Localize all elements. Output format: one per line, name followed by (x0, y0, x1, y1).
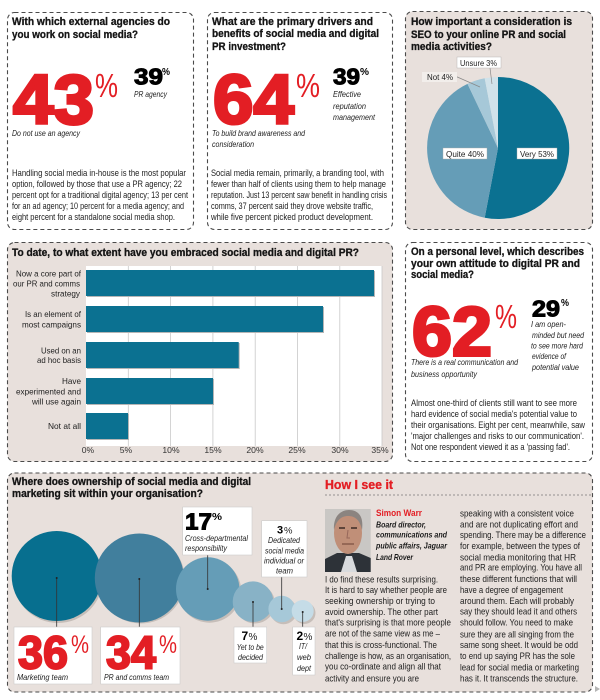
callout: 3 percent dedicated individual: 3 (277, 524, 283, 536)
callout: 2 percent IT web dept: web (297, 652, 311, 662)
axis labels: 20% (246, 445, 264, 455)
text block: drivers summary: Social media remain, primarily, a branding tool, with (211, 168, 384, 178)
text block: agencies summary: Handling social media in-house is the most popular (12, 168, 186, 178)
category labels: Now a core part of (16, 268, 82, 278)
stat: 43 percent do not use an agency: % (95, 67, 118, 104)
category labels: experimented and (16, 386, 81, 396)
text block: drivers summary (210, 168, 387, 222)
stat: 64 percent brand awareness: To build brand awareness and (212, 128, 305, 138)
heading: personal attitude: your own attitude to digital PR and (411, 258, 580, 270)
heading: how I see it: How I see it (325, 477, 394, 492)
category labels (13, 268, 82, 431)
text block: attitude summary: Almost one-third of clients still want to see more (411, 398, 577, 408)
text block: attitude summary (411, 398, 585, 452)
text block: opinion column one: activity and ensure you are (325, 673, 419, 683)
callout: 17 percent cross-departmental: responsibility (185, 543, 228, 553)
stat: 29 percent open-minded: I am open- (531, 319, 566, 329)
callout: 7 percent yet to be decided: 7 (242, 629, 248, 643)
text block: agencies summary: option, followed by those that use a PR agency; 22 (12, 179, 182, 189)
bubble: cross-departmental (176, 557, 239, 621)
stat: 39 percent effective reputation management: management (333, 112, 376, 122)
text block: opinion column one: I do find these results surprising. (325, 574, 438, 584)
panel: SEO importance (406, 12, 592, 230)
stat: 43 percent do not use an agency: Do not use an agency (12, 128, 81, 138)
callout: 3 percent dedicated individual: Dedicated (268, 535, 300, 545)
callout: 17 percent cross-departmental: Cross-departmental (185, 533, 249, 543)
callout: 36 percent marketing team: Marketing team (17, 672, 68, 682)
stat: 29 percent open-minded: minded but need (532, 330, 584, 340)
text block: drivers summary: comms, 37 percent said they drove website traffic, (211, 201, 373, 211)
heading: drivers and benefits: PR investment? (212, 41, 286, 53)
category labels: ad hoc basis (37, 355, 81, 365)
stat: 29 percent open-minded: 29 (532, 296, 560, 322)
text block: opinion column one (325, 574, 451, 683)
text block: opinion column two: say they should lead it and others (460, 607, 577, 617)
text block: opinion column one: avoid ownership. The other part (325, 607, 438, 617)
callout: 36 percent marketing team: % (71, 631, 89, 659)
text block: opinion column two: speaking with a consistent voice (460, 508, 574, 518)
text block: attitude summary: Not one respondent viewed it as a 'passing fad'. (411, 442, 570, 452)
text block: opinion column one: are not of the same view as me – (325, 628, 441, 638)
heading: external agencies (12, 16, 170, 41)
byline: Simon Warr: communications and (376, 530, 448, 540)
heading: SEO importance (411, 16, 572, 53)
callout: 2 percent IT web dept: IT/ (299, 641, 308, 651)
stat: 62 percent real opportunity: % (495, 298, 517, 335)
pie chart: SEO importance (422, 57, 569, 219)
pie label: quite: Quite 40% (446, 149, 484, 159)
heading: embraced social media: To date, to what extent have you embraced social media and digital PR? (12, 247, 359, 259)
callout: 3 percent dedicated individual: individual or (264, 556, 305, 566)
pie label: not: Not 4% (427, 72, 453, 82)
text block: opinion column two: these different functions that will (460, 574, 577, 584)
text block: opinion column two: and are not duplicating effort and (460, 519, 578, 529)
axis labels: 0% (82, 445, 95, 455)
callout: 2 percent IT web dept: % (304, 632, 312, 643)
axis labels: 15% (204, 445, 222, 455)
stat: 62 percent real opportunity: There is a real communication and (411, 357, 518, 367)
text block: drivers summary: fewer than half of clients using them to help manage (211, 179, 386, 189)
callout: 7 percent yet to be decided (234, 627, 267, 663)
stat: 62 percent real opportunity (411, 292, 518, 379)
byline: Simon Warr: Simon Warr (376, 508, 422, 519)
callout: 3 percent dedicated individual: % (284, 526, 293, 536)
category labels: Used on an (41, 346, 81, 356)
callout: 17 percent cross-departmental: 17 (185, 508, 212, 534)
stat: 39 percent effective reputation management (333, 64, 376, 122)
bar: element of most campaigns 28 percent (86, 306, 323, 332)
axis labels (82, 445, 389, 455)
text block: opinion column one: challenge is how, as an organisation, (325, 651, 451, 661)
text block: agencies summary: for an ad agency; 10 percent for a media agency; and (12, 201, 184, 211)
panel: external agencies (8, 12, 194, 230)
bar: core part 34 percent (86, 270, 374, 296)
stat: 29 percent open-minded: evidence of (532, 351, 567, 361)
category labels: our PR and comms (13, 278, 80, 288)
callout: 2 percent IT web dept (293, 627, 315, 675)
text block: agencies summary (12, 168, 188, 222)
heading: personal attitude: On a personal level, which describes (411, 246, 584, 258)
heading: SEO importance: How important a consideration is (411, 16, 572, 28)
text block: opinion column two (460, 508, 586, 683)
category labels: Is an element of (25, 309, 82, 319)
pie label: very: Very 53% (520, 149, 554, 159)
bubble: IT web dept (292, 600, 314, 622)
callout: 7 percent yet to be decided: Yet to be (237, 642, 264, 652)
text block: opinion column one: that this is cross-functional. The (325, 640, 437, 650)
stat: 39 percent effective reputation management: reputation (333, 101, 366, 111)
stat: 39 percent effective reputation management: 39 (333, 64, 360, 90)
heading: external agencies: you work on social media? (12, 29, 138, 41)
bubble chart: ownership (12, 531, 315, 628)
bar: ad hoc 18 percent (86, 342, 239, 368)
bubble: yet to be decided (233, 581, 273, 622)
stat: 39 percent PR agency: % (162, 67, 170, 78)
category labels: strategy (51, 288, 81, 298)
text block: opinion column two: for example, between the types of (460, 541, 580, 551)
panel: ownership and opinion (8, 473, 592, 692)
text block: opinion column one: that's surprising is that more people (325, 618, 451, 628)
callout: 36 percent marketing team (14, 626, 92, 684)
stat: 39 percent PR agency (134, 64, 170, 99)
byline: Simon Warr: public affairs, Jaguar (375, 542, 448, 550)
callout: 17 percent cross-departmental: % (212, 512, 222, 523)
text block: opinion column two: have a degree of engagement (460, 585, 563, 595)
stat: 39 percent effective reputation management: % (360, 67, 369, 78)
text block: opinion column two: sure they are all singing from the (460, 629, 574, 639)
axis labels: 25% (288, 445, 306, 455)
stat: 43 percent do not use an agency: 43 (13, 60, 94, 138)
heading: drivers and benefits (212, 16, 379, 53)
bubble: marketing team (12, 531, 102, 621)
heading: personal attitude (411, 246, 584, 281)
heading: SEO importance: SEO to your online PR and social (411, 29, 566, 41)
text block: opinion column two: around them. Each will probably (460, 596, 574, 606)
category labels: Have (62, 376, 81, 386)
text block: opinion column two: to end up saying PR has the sole (460, 651, 575, 661)
callout: 34 percent PR and comms team: % (159, 631, 177, 659)
callout: 34 percent PR and comms team: 34 (106, 626, 156, 678)
bubble: dedicated individual (268, 596, 295, 622)
text block: opinion column two: social media monitoring that HR (460, 552, 576, 562)
stat: 39 percent PR agency: PR agency (134, 89, 168, 99)
stat: 29 percent open-minded: % (561, 298, 569, 309)
stat: 64 percent brand awareness: 64 (213, 60, 294, 138)
byline: Simon Warr: Land Rover (376, 553, 414, 562)
heading: external agencies: With which external agencies do (12, 16, 170, 28)
bar: experimented 15 percent (86, 378, 213, 404)
category labels: will use again (31, 396, 81, 406)
axis labels: 35% (371, 445, 389, 455)
panel: personal attitude (406, 242, 592, 462)
panel: drivers and benefits (208, 12, 392, 230)
text block: opinion column one: It is hard to say whether people are (325, 585, 447, 595)
heading: drivers and benefits: What are the primary drivers and (212, 16, 373, 28)
stat: 39 percent PR agency: 39 (134, 64, 163, 90)
stat: 64 percent brand awareness: consideration (212, 139, 254, 149)
callout: 34 percent PR and comms team: PR and comms team (104, 672, 169, 682)
bar: not at all 5 percent (86, 413, 128, 439)
callout: 3 percent dedicated individual (262, 521, 307, 577)
heading: drivers and benefits: benefits of social media and digital (212, 28, 379, 40)
callout: 7 percent yet to be decided: % (248, 632, 258, 643)
text block: opinion column two: should follow. You need to make (460, 618, 573, 628)
icon: continuation arrow (595, 686, 600, 692)
stat: 62 percent real opportunity: 62 (412, 292, 492, 370)
text block: drivers summary: reputation. Just 13 percent saw benefit in handling crisis (211, 190, 387, 200)
text block: agencies summary: percent opt for a traditional digital agency; 13 per cent (12, 190, 188, 200)
byline: Simon Warr: Board director, (376, 520, 426, 530)
stat: 39 percent effective reputation management: Effective (333, 89, 361, 99)
stat: 29 percent open-minded (531, 296, 584, 372)
heading: ownership (12, 476, 251, 500)
text block: opinion column two: has it. It transcends the structure. (460, 673, 578, 683)
callout: 34 percent PR and comms team (101, 626, 180, 684)
panel: extent of embracing social media (8, 242, 392, 462)
category labels: most campaigns (22, 320, 81, 330)
callout: 7 percent yet to be decided: decided (238, 652, 263, 662)
axis labels: 30% (331, 445, 349, 455)
heading: ownership: Where does ownership of social media and digital (12, 476, 251, 488)
callout: 36 percent marketing team: 36 (18, 626, 68, 678)
stat: 62 percent real opportunity: business opportunity (411, 369, 478, 379)
photo: Simon Warr portrait (325, 509, 371, 572)
text block: drivers summary: while five percent picked product development. (210, 212, 373, 222)
category labels: Not at all (48, 421, 81, 431)
callout: 3 percent dedicated individual: team (276, 566, 293, 576)
callout: 2 percent IT web dept: 2 (296, 629, 304, 643)
byline: Simon Warr (375, 508, 448, 562)
callout: 3 percent dedicated individual: social media (265, 546, 304, 556)
stat: 64 percent brand awareness: % (296, 67, 320, 104)
heading: personal attitude: social media? (411, 269, 474, 281)
text block: opinion column two: lead for social media or marketing (460, 662, 579, 672)
stat: 64 percent brand awareness (212, 60, 320, 149)
text block: opinion column one: you co-ordinate and align all that (325, 662, 441, 672)
pie label: unsure: Unsure 3% (460, 58, 497, 68)
axis labels: 5% (120, 445, 133, 455)
axis labels: 10% (162, 445, 180, 455)
stat: 29 percent open-minded: to see more hard (531, 340, 583, 350)
text block: agencies summary: eight percent for a standalone social media shop. (12, 212, 175, 222)
stat: 29 percent open-minded: potential value (531, 362, 579, 372)
callout: 2 percent IT web dept: dept (297, 663, 312, 673)
callout: 17 percent cross-departmental (183, 507, 252, 555)
bubble: PR and comms team (95, 534, 184, 622)
heading: ownership: marketing sit within your organisation? (12, 488, 203, 500)
text block: opinion column one: seeking ownership or trying to (325, 596, 435, 606)
bar chart: extent of embracing (13, 266, 389, 455)
text block: opinion column two: same song sheet. It would be odd (460, 640, 578, 650)
heading: SEO importance: media activities? (411, 41, 492, 53)
